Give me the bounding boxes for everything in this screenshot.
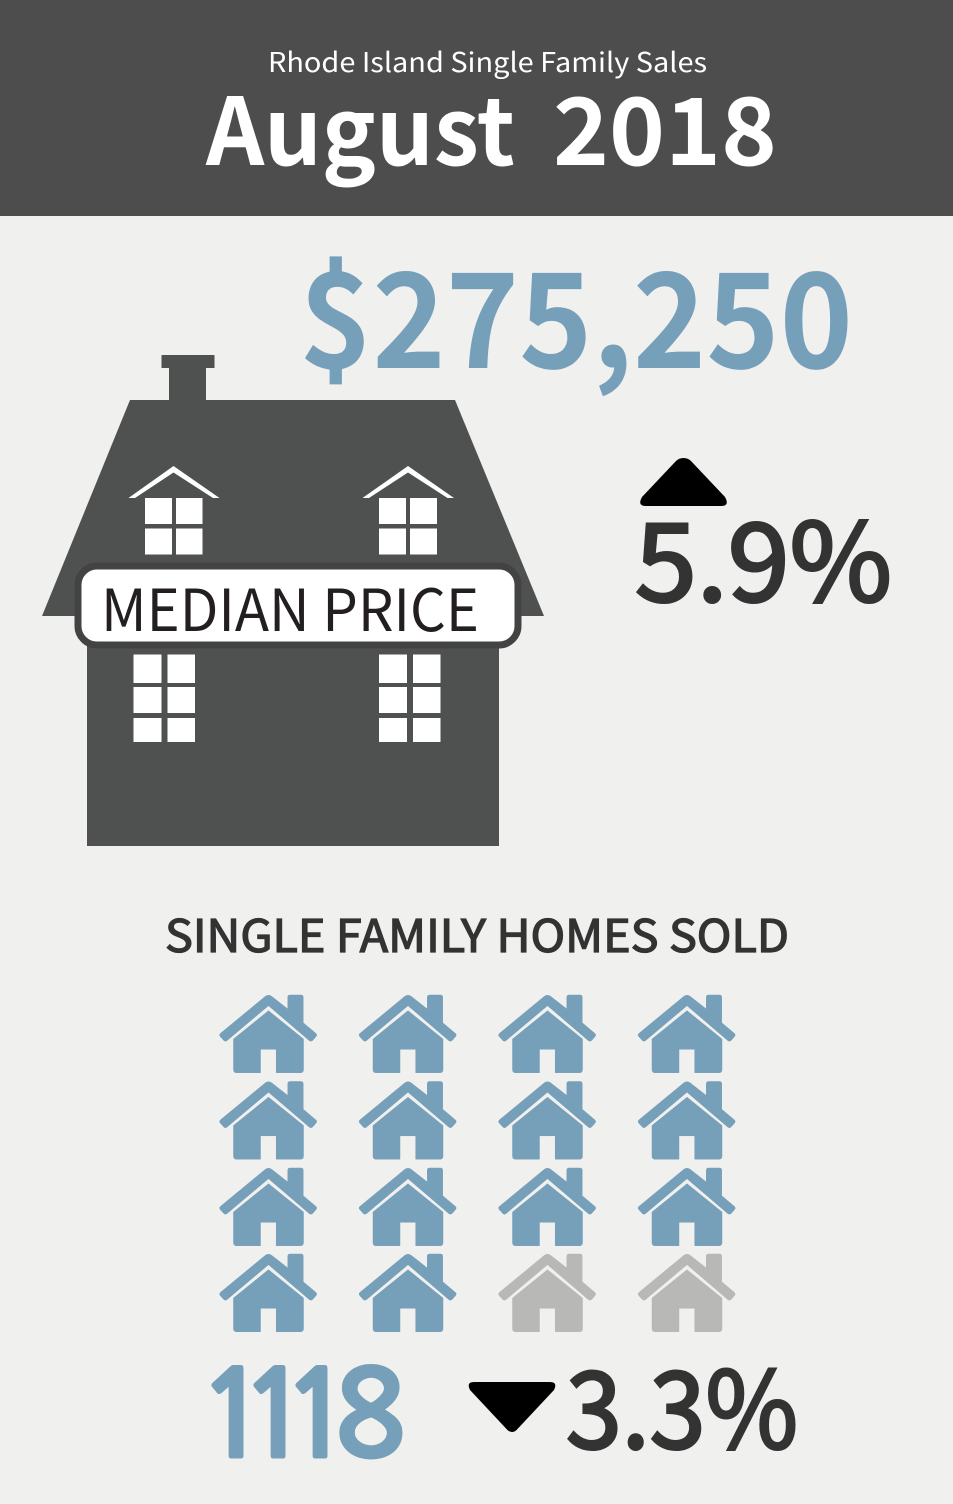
dormer window left xyxy=(128,466,220,554)
lower window left xyxy=(134,654,195,742)
homes sold heading: SINGLE FAMILY HOMES SOLD xyxy=(165,900,789,965)
header band xyxy=(0,0,953,216)
title: 2018 xyxy=(553,57,777,192)
lower window right xyxy=(379,654,440,742)
arrow down xyxy=(469,1382,555,1432)
roof xyxy=(42,400,544,616)
median price house illustration xyxy=(42,355,544,846)
homes sold count: 1118 xyxy=(197,1356,407,1475)
sales change percentage: 3.3% xyxy=(566,1325,798,1479)
chimney xyxy=(162,355,214,402)
house body xyxy=(87,610,499,846)
median price value: $275,250 xyxy=(299,216,853,407)
dormer window right xyxy=(362,466,454,554)
remainder houses xyxy=(499,1254,735,1332)
price change percentage: 5.9% xyxy=(635,477,892,633)
median price label: MEDIAN PRICE xyxy=(101,564,479,648)
title: August xyxy=(205,57,515,192)
sold houses xyxy=(220,995,735,1332)
arrow up xyxy=(640,458,727,506)
house pictogram grid xyxy=(220,995,735,1332)
subtitle: Rhode Island Single Family Sales xyxy=(268,41,707,80)
